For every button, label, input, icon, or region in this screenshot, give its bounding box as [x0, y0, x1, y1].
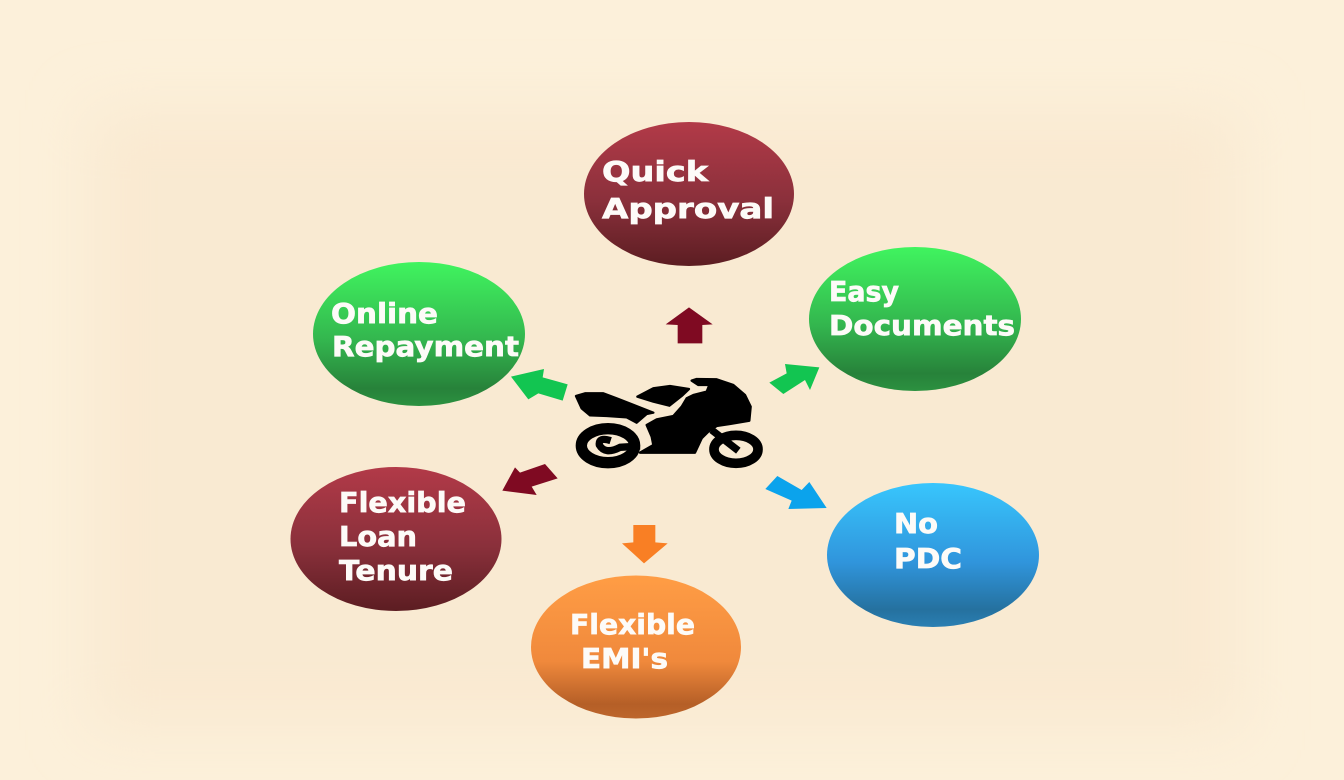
- arrow: to Easy Documents: [769, 364, 819, 394]
- bubble: Flexible EMI's: [531, 576, 741, 718]
- arrow: to No PDC: [765, 476, 827, 509]
- bubble: Easy Documents: [809, 247, 1021, 391]
- bubble: Easy Documents: Easy: [829, 275, 899, 308]
- bubble: Flexible Loan Tenure: Loan: [339, 520, 417, 553]
- bubble: Quick Approval: Quick: [602, 155, 710, 188]
- bubble: Quick Approval: [584, 122, 794, 266]
- bubble: Flexible Loan Tenure: [290, 467, 502, 611]
- bubble: Flexible EMI's: EMI's: [581, 642, 668, 675]
- arrow: to Flexible Loan Tenure: [502, 464, 558, 495]
- bubble: No PDC: PDC: [894, 542, 962, 575]
- bubble: No PDC: No: [894, 507, 938, 540]
- bubble: Flexible Loan Tenure: Tenure: [339, 554, 453, 587]
- bubble: Flexible EMI's: Flexible: [570, 608, 695, 641]
- arrow: to Online Repayment: [511, 369, 568, 401]
- bubble: Online Repayment: Repayment: [332, 330, 519, 363]
- bubble: No PDC: [827, 483, 1039, 627]
- arrow: to Flexible EMI's: [622, 525, 668, 563]
- arrow: up to Quick Approval: [666, 307, 713, 343]
- bubble: Flexible Loan Tenure: Flexible: [339, 486, 466, 519]
- bubble: Easy Documents: Documents: [829, 309, 1015, 342]
- arrows: [502, 307, 827, 563]
- bubble: Quick Approval: Approval: [602, 192, 774, 225]
- bubble: Online Repayment: Online: [331, 297, 438, 330]
- icon: motorcycle: [576, 379, 758, 463]
- bubble: Online Repayment: [313, 262, 525, 406]
